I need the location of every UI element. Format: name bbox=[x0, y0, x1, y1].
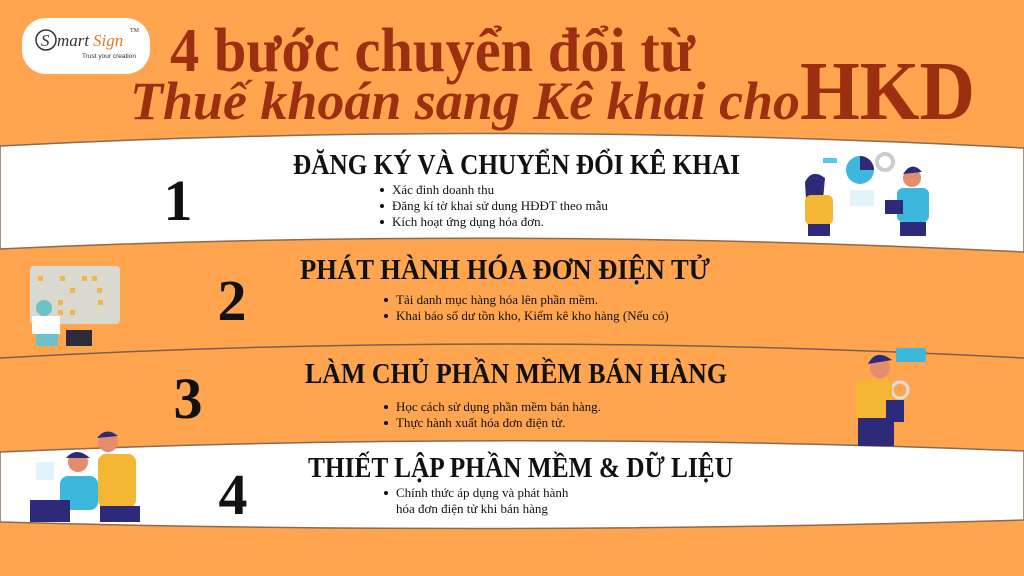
illustration 4: two people with laptop bbox=[30, 431, 140, 522]
illustration 3: person with tablet bbox=[856, 348, 926, 446]
step 2 bbox=[218, 253, 710, 333]
step 3 bbox=[174, 356, 727, 431]
step 2: PHÁT HÀNH HÓA ĐƠN ĐIỆN TỬ bbox=[300, 253, 710, 286]
step 1: Đăng kí tờ khai sử dung HĐĐT theo mẫu bbox=[392, 198, 608, 213]
step 1 bbox=[164, 147, 740, 233]
step 3: Thực hành xuất hóa đơn điện tử. bbox=[396, 415, 565, 430]
logo bbox=[22, 18, 150, 74]
step 4: 4 bbox=[218, 462, 248, 527]
logo: S bbox=[41, 31, 50, 50]
step 1: 1 bbox=[164, 168, 192, 233]
title: HKD bbox=[800, 45, 975, 138]
step 4 bbox=[218, 450, 733, 527]
logo: Sign bbox=[93, 31, 123, 50]
step 2: Khai báo số dư tồn kho, Kiểm kê kho hàng (Nếu có) bbox=[396, 308, 669, 323]
title bbox=[130, 17, 975, 138]
band 4 white bbox=[0, 441, 1024, 529]
step 4: hóa đơn điện tử khi bán hàng bbox=[396, 501, 548, 516]
step 1: Xác đinh doanh thu bbox=[392, 182, 495, 197]
illustration 2: board and person bbox=[30, 266, 120, 346]
title: Thuế khoán sang Kê khai cho bbox=[130, 71, 800, 131]
illustration 1: two people bbox=[805, 154, 929, 236]
band 1 white bbox=[0, 133, 1024, 252]
logo: TM bbox=[130, 28, 140, 34]
step 3: LÀM CHỦ PHẦN MỀM BÁN HÀNG bbox=[305, 356, 727, 390]
step 1: Kích hoạt ứng dụng hóa đơn. bbox=[392, 214, 544, 229]
band 2/3 divider bbox=[0, 344, 1024, 358]
step 3: Học cách sử dụng phần mềm bán hàng. bbox=[396, 399, 601, 414]
step 2: Tải danh mục hàng hóa lên phần mềm. bbox=[396, 292, 598, 307]
step 2: 2 bbox=[218, 268, 246, 333]
title: 4 bước chuyển đổi từ bbox=[170, 17, 696, 85]
step 4: THIẾT LẬP PHẦN MỀM & DỮ LIỆU bbox=[308, 450, 733, 484]
step 4: Chính thức áp dụng và phát hành bbox=[396, 485, 569, 500]
logo: Trust your creation bbox=[82, 53, 136, 60]
step 3: 3 bbox=[174, 366, 202, 431]
step 1: ĐĂNG KÝ VÀ CHUYỂN ĐỔI KÊ KHAI bbox=[293, 147, 740, 181]
logo: mart bbox=[57, 31, 90, 50]
